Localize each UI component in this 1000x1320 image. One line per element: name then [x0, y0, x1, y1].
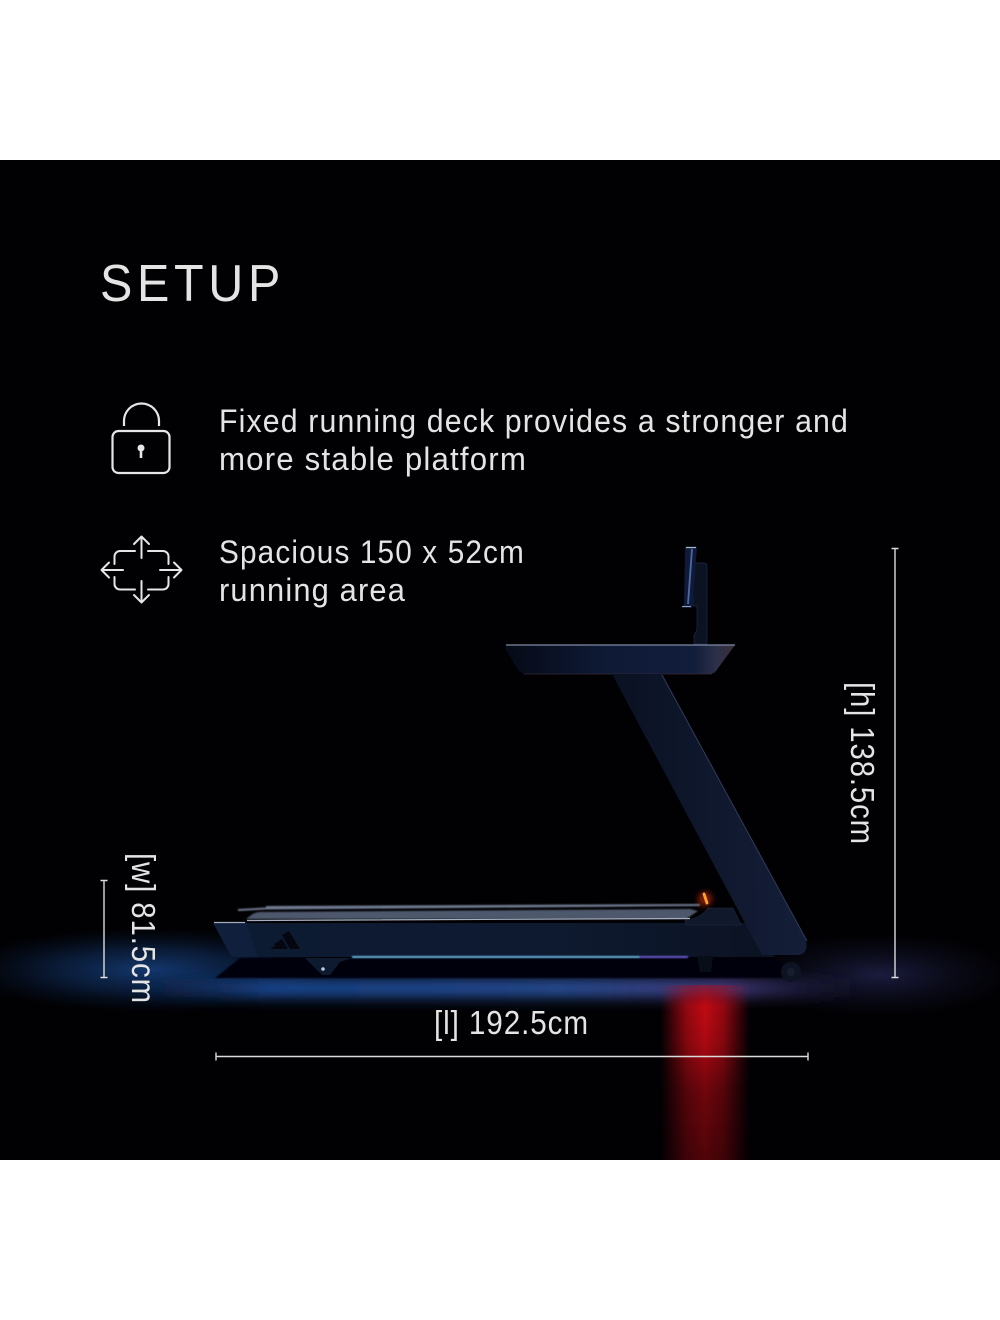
text: fixed running deck: more stable platform	[219, 441, 527, 477]
height label: [h] 138.5cm	[844, 682, 881, 845]
floor glow: blue and red light	[0, 928, 1000, 1160]
text: fixed running deck	[219, 403, 849, 477]
screen arm	[693, 563, 707, 644]
dimension: height	[844, 548, 898, 978]
treadmill	[213, 547, 807, 982]
side rail	[238, 904, 700, 911]
icon: padlock	[112, 404, 170, 473]
deck edge highlights	[214, 918, 690, 922]
dimension: width	[100, 853, 162, 1004]
tablet screen	[682, 547, 697, 608]
text: fixed running deck: Fixed running deck provides a stronger and	[219, 403, 849, 439]
light strip under deck	[352, 956, 640, 958]
logo: three bars	[270, 931, 300, 949]
wheel	[781, 962, 801, 982]
dimension: length	[216, 1004, 808, 1060]
upright post	[612, 674, 807, 955]
deck rear panel	[213, 922, 258, 957]
running belt	[246, 909, 698, 919]
text: running area: running area	[219, 572, 406, 608]
console tray	[505, 645, 735, 674]
rear foot	[305, 958, 352, 975]
front cover	[685, 908, 741, 925]
icon: expanding area arrows	[102, 536, 182, 602]
red indicator light	[698, 892, 712, 906]
width label: [w] 81.5cm	[125, 853, 162, 1004]
title: SETUP	[100, 255, 285, 313]
text: running area	[219, 534, 525, 608]
infographic canvas	[0, 160, 1000, 1160]
length label: [l] 192.5cm	[434, 1004, 589, 1041]
black panel background	[0, 160, 1000, 1160]
front leg	[697, 956, 713, 972]
text: running area: Spacious 150 x 52cm	[219, 534, 525, 570]
floor shadow under deck	[215, 958, 800, 978]
deck body	[213, 923, 775, 957]
